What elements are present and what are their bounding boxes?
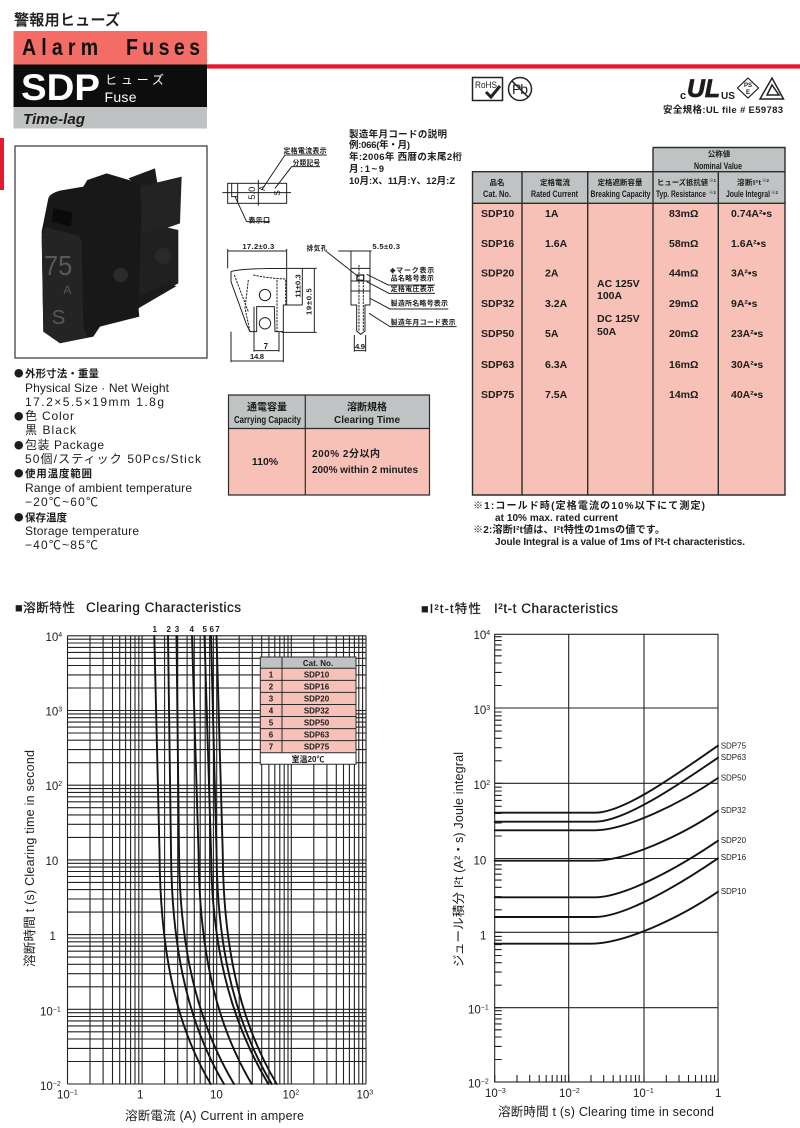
fuse curves 1 to 7: [154, 636, 277, 1084]
table: carrying capacity and clearing time: 通電容量: [247, 400, 287, 414]
front view drawing: 14.8: [250, 352, 265, 361]
list: physical specifications: 色 Color: [25, 409, 74, 423]
table header: ※2: [762, 178, 769, 183]
x axis tick labels: 1: [137, 1090, 143, 1102]
curve numbers: 6: [209, 625, 214, 634]
legend table: 室温20℃: [292, 754, 324, 764]
table body: 1.6A: [545, 238, 568, 250]
curve numbers: 7: [215, 625, 220, 634]
list: physical specifications: Storage temperature: [25, 524, 139, 538]
table body: SDP16: [481, 238, 514, 250]
table body: DC 125V: [597, 313, 640, 325]
y axis tick labels: 4: [486, 630, 490, 637]
table body: 2A: [545, 268, 559, 280]
side view drawing: [307, 242, 457, 352]
table body: 1.6A²•s: [731, 238, 766, 250]
y axis tick labels: 10: [46, 632, 58, 644]
category band: Alarm Fuses: Fuses: [126, 35, 200, 60]
category band: Alarm Fuses: [14, 31, 207, 64]
x axis tick labels: −1: [70, 1090, 78, 1096]
curve labels: SDP63: [721, 753, 747, 762]
heading: clearing characteristics: ■溶断特性: [15, 600, 75, 615]
table body: 0.74A²•s: [731, 208, 772, 220]
icon: UL recognized mark: US: [721, 91, 735, 102]
table header: Rated Current: [531, 189, 579, 200]
table header: 品名: [490, 177, 504, 187]
product band: SDP Fuse: Fuse: [104, 89, 137, 105]
table body: 50A: [597, 326, 617, 338]
curve labels: SDP75: [721, 742, 747, 750]
table header: ※1: [709, 178, 716, 183]
x axis title: 溶断時間 t (s) Clearing time in second: [498, 1105, 714, 1119]
curve labels: SDP32: [721, 806, 747, 815]
date code explanation: 例:066(年・月): [349, 139, 410, 151]
y axis tick labels: 3: [58, 706, 62, 714]
legend table: SDP50: [304, 718, 330, 728]
list: physical specifications: Physical Size · Net Weight: [25, 381, 170, 395]
table header: Breaking Capacity: [590, 189, 651, 200]
footnotes: ※2:溶断I²t値は、I²t特性の1msの値です。: [473, 523, 665, 536]
icon: fuse body: A: [63, 283, 71, 297]
table header: ※1: [709, 190, 716, 195]
footnotes: Joule Integral is a value of 1ms of I²t-t characteristics.: [495, 537, 745, 548]
legend table: SDP32: [304, 706, 330, 716]
icon: UL recognized mark: [680, 75, 735, 103]
list: physical specifications: 保存温度: [25, 511, 68, 524]
x axis tick labels: −1: [646, 1088, 654, 1095]
footnotes: [473, 499, 745, 548]
curve numbers: [152, 625, 220, 634]
side view drawing: ◈マーク表示: [389, 265, 434, 274]
y axis tick labels: −2: [53, 1081, 61, 1088]
table header: Cat. No.: [483, 189, 511, 200]
table header: ※2: [771, 190, 778, 195]
table header: 溶断I²t: [737, 177, 762, 187]
top view drawing: 分類記号: [293, 158, 320, 167]
icon: PSE diamond: E: [746, 90, 750, 96]
x axis tick labels: 10: [282, 1090, 295, 1102]
x axis tick labels: 3: [369, 1090, 373, 1096]
table body: SDP75: [481, 389, 514, 401]
icon: UL recognized mark: c: [680, 90, 686, 102]
panel: product photo: [15, 146, 207, 358]
list: physical specifications: ●: [14, 438, 24, 452]
icon: RoHS mark: RoHS: [475, 80, 497, 91]
list: physical specifications: 黒 Black: [25, 423, 77, 437]
table: carrying capacity and clearing time: 200% within 2 minutes: [312, 465, 418, 476]
legend table: SDP16: [304, 682, 330, 692]
table: carrying capacity and clearing time: Clearing Time: [334, 415, 400, 426]
side view drawing: 定格電圧表示: [391, 284, 434, 293]
side view drawing: 5.5±0.3: [372, 242, 400, 251]
list: physical specifications: 17.2×5.5×19mm 1.8g: [25, 395, 164, 409]
list: physical specifications: 50個/スティック 50Pcs/Stick: [25, 452, 202, 466]
list: physical specifications: −40℃~85℃: [25, 538, 98, 552]
x axis tick labels: 10: [356, 1090, 369, 1102]
y axis tick labels: 2: [486, 780, 490, 787]
table body: 44mΩ: [669, 268, 698, 280]
list: physical specifications: −20℃~60℃: [25, 495, 98, 509]
icon: fuse body: [42, 168, 182, 343]
x axis tick labels: 1: [715, 1088, 721, 1100]
table: carrying capacity and clearing time: 110%: [252, 456, 279, 468]
top view drawing: S: [273, 190, 282, 196]
table header: Typ. Resistance: [656, 189, 706, 200]
icon: RoHS mark: [472, 78, 502, 100]
date code explanation: 年:2006年 西暦の末尾2桁: [349, 151, 462, 163]
date code explanation: 10月:X、11月:Y、12月:Z: [349, 176, 455, 187]
curve labels: SDP10: [721, 887, 747, 896]
heading: clearing characteristics: Clearing Characteristics: [86, 600, 241, 615]
list: physical specifications: Range of ambient temperature: [25, 481, 192, 495]
side view drawing: 製造年月コード表示: [391, 317, 456, 326]
table body: [481, 208, 772, 401]
side view drawing: 製造所名略号表示: [391, 299, 448, 308]
y axis tick labels: 10: [468, 1078, 481, 1090]
curve labels: SDP16: [721, 853, 747, 862]
curve numbers: 3: [175, 625, 180, 634]
table body: 30A²•s: [731, 359, 763, 371]
table header: Joule Integral: [726, 189, 770, 200]
curve labels: [721, 742, 747, 896]
y axis tick labels: 10: [468, 1004, 481, 1016]
footnotes: at 10% max. rated current: [495, 513, 619, 524]
title block: [14, 11, 207, 128]
table header: 定格遮断容量: [598, 177, 643, 187]
icon: PSE diamond: [738, 78, 758, 98]
product band: SDP Fuse: ヒューズ: [105, 72, 164, 87]
legend table: SDP10: [304, 670, 330, 680]
curve numbers: 4: [189, 625, 194, 634]
front view drawing: 17.2±0.3: [242, 242, 274, 251]
table body: SDP63: [481, 359, 514, 371]
y axis tick labels: 4: [58, 632, 62, 639]
curve numbers: 1: [152, 625, 157, 634]
list: physical specifications: ●: [14, 366, 24, 380]
list: physical specifications: ●: [14, 466, 24, 480]
table body: SDP32: [481, 298, 514, 310]
legend table: [260, 657, 356, 764]
x axis tick labels: 10: [485, 1088, 498, 1100]
table: carrying capacity and clearing time: 200% 2分以内: [312, 447, 380, 460]
legend table: 2: [269, 682, 274, 692]
side view drawing: 4.9: [355, 342, 365, 351]
list: physical specifications: ●: [14, 409, 24, 423]
y axis tick labels: −1: [53, 1006, 61, 1014]
legend table: SDP20: [304, 694, 330, 704]
y axis tick labels: [468, 630, 490, 1090]
y axis tick labels: 3: [486, 705, 490, 712]
curve numbers: 2: [166, 625, 171, 634]
y axis tick labels: [40, 632, 62, 1093]
table: ratings: [472, 148, 785, 495]
y axis tick labels: −1: [481, 1004, 489, 1012]
table body: 29mΩ: [669, 298, 698, 310]
y axis tick labels: 10: [46, 706, 58, 718]
top view drawing: A: [258, 185, 267, 191]
y axis tick labels: 10: [46, 781, 58, 793]
list: physical specifications: 包装 Package: [25, 437, 104, 452]
table body: SDP20: [481, 268, 514, 280]
top view drawing: [222, 146, 327, 225]
front view drawing: 19±0.5: [305, 288, 314, 315]
table body: 5A: [545, 328, 559, 340]
table body: 9A²•s: [731, 298, 758, 310]
y axis tick labels: 1: [480, 930, 486, 942]
heading: I2t-t characteristics: I²t-t Characteristics: [494, 601, 618, 616]
category band: Alarm Fuses: Alarm: [22, 35, 98, 60]
icon: UL recognized mark: UL: [687, 75, 720, 103]
table header: 公称値: [708, 148, 731, 158]
y axis tick labels: 2: [58, 781, 62, 788]
front view drawing: 11±0.3: [294, 274, 303, 298]
table body: 16mΩ: [669, 359, 698, 371]
table body: 1A: [545, 208, 559, 220]
table body: 83mΩ: [669, 208, 698, 220]
table body: 3.2A: [545, 298, 568, 310]
table body: 20mΩ: [669, 328, 698, 340]
front view drawing: [228, 242, 317, 362]
y axis tick labels: 10: [474, 705, 486, 717]
icon: triangle certification: [760, 78, 784, 99]
x axis tick labels: 10: [559, 1088, 572, 1100]
red header rule: [207, 64, 800, 69]
icon: fuse body: S: [52, 306, 65, 329]
product band: SDP Fuse: SDP: [21, 67, 100, 108]
table header: Nominal Value: [694, 161, 742, 172]
legend table: Cat. No.: [303, 659, 333, 668]
red side tab: [0, 138, 4, 190]
japanese category heading: 警報用ヒューズ: [14, 11, 120, 29]
table header: ヒューズ抵抗値: [657, 178, 709, 187]
curve labels: SDP50: [721, 774, 747, 782]
legend table: 5: [269, 718, 274, 728]
x axis tick labels: 10: [57, 1090, 70, 1102]
curve labels: SDP20: [721, 836, 747, 845]
icon: PSE diamond: PS: [744, 83, 752, 89]
table body: 23A²•s: [731, 328, 763, 340]
y axis title: 溶断時間 t (s) Clearing time in second: [23, 750, 37, 967]
heading: I2t-t characteristics: ■I²t-t特性: [421, 601, 481, 616]
table body: 6.3A: [545, 359, 568, 371]
legend table: 6: [269, 730, 274, 740]
product band: SDP Fuse: [14, 64, 207, 108]
chart: clearing characteristics: [23, 625, 373, 1123]
chart: I2t-t characteristics: [451, 630, 747, 1119]
y axis tick labels: 10: [40, 1081, 53, 1093]
heading: clearing characteristics: [15, 600, 241, 615]
table body: AC 125V: [597, 278, 640, 290]
top view drawing: 表示口: [248, 216, 270, 225]
legend table: SDP75: [304, 742, 330, 752]
table body: 3A²•s: [731, 268, 758, 280]
diagram: fuse dimensions: [222, 146, 457, 362]
type band: Time-lag: [14, 107, 207, 128]
joule integral curves: [495, 746, 718, 944]
table header: [483, 148, 778, 200]
x axis tick labels: [57, 1090, 373, 1102]
legend table: 4: [269, 706, 274, 716]
curve numbers: 5: [202, 625, 207, 634]
x axis tick labels: [485, 1088, 721, 1100]
legend table: 3: [269, 694, 274, 704]
list: physical specifications: ●: [14, 510, 24, 524]
chart grid: [68, 636, 366, 1084]
x axis tick labels: −2: [572, 1088, 580, 1095]
footnotes: ※1:コールド時(定格電流の10%以下にて測定): [473, 499, 705, 512]
table: carrying capacity and clearing time: 溶断規格: [347, 400, 387, 414]
legend table: 1: [269, 670, 274, 680]
top view drawing: 定格電流表示: [283, 146, 327, 155]
y axis tick labels: 10: [40, 1006, 53, 1018]
chart grid: [495, 634, 718, 1082]
y axis title: ジュール積分 I²t (A²・s) Joule integral: [451, 752, 466, 967]
date code explanation: 月:1~9: [349, 164, 384, 175]
x axis tick labels: 2: [295, 1090, 299, 1096]
list: physical specifications: [14, 366, 202, 552]
y axis tick labels: 10: [474, 780, 486, 792]
legend table: SDP63: [304, 730, 330, 740]
table: carrying capacity and clearing time: [228, 395, 430, 495]
date code explanation: 製造年月コードの説明: [349, 128, 447, 140]
side view drawing: 品名略号表示: [391, 274, 434, 283]
table body: 58mΩ: [669, 238, 698, 250]
table header: 定格電流: [540, 177, 570, 187]
x axis tick labels: 10: [210, 1090, 223, 1102]
y axis tick labels: 10: [46, 856, 58, 868]
table body: SDP50: [481, 328, 514, 340]
table body: 14mΩ: [669, 389, 698, 401]
heading: I2t-t characteristics: [421, 601, 618, 616]
side view drawing: 排気孔: [307, 244, 328, 253]
icon: lead free mark: [508, 78, 532, 100]
list: physical specifications: 外形寸法・重量: [25, 367, 100, 380]
x axis tick labels: −3: [498, 1088, 506, 1095]
y axis tick labels: 10: [474, 630, 486, 642]
icon: fuse body: 75: [44, 250, 72, 281]
type band: Time-lag: Time-lag: [23, 111, 85, 128]
list: physical specifications: 使用温度範囲: [25, 467, 92, 480]
x axis title: 溶断電流 (A) Current in ampere: [125, 1109, 304, 1123]
safety standard text: 安全規格:UL file # E59783: [663, 104, 783, 116]
table: carrying capacity and clearing time: Carrying Capacity: [234, 415, 301, 426]
y axis tick labels: 1: [50, 931, 56, 943]
front view drawing: 7: [264, 342, 269, 351]
table body: 40A²•s: [731, 389, 763, 401]
table body: 100A: [597, 290, 623, 302]
date code explanation: [349, 128, 462, 187]
x axis tick labels: 10: [633, 1088, 646, 1100]
legend table: 7: [269, 742, 274, 752]
top view drawing: 5.0: [247, 187, 257, 200]
table body: 7.5A: [545, 389, 568, 401]
y axis tick labels: 10: [474, 856, 486, 868]
icon: lead free mark: Pb: [512, 81, 528, 97]
y axis tick labels: −2: [481, 1078, 489, 1086]
table body: SDP10: [481, 208, 514, 220]
